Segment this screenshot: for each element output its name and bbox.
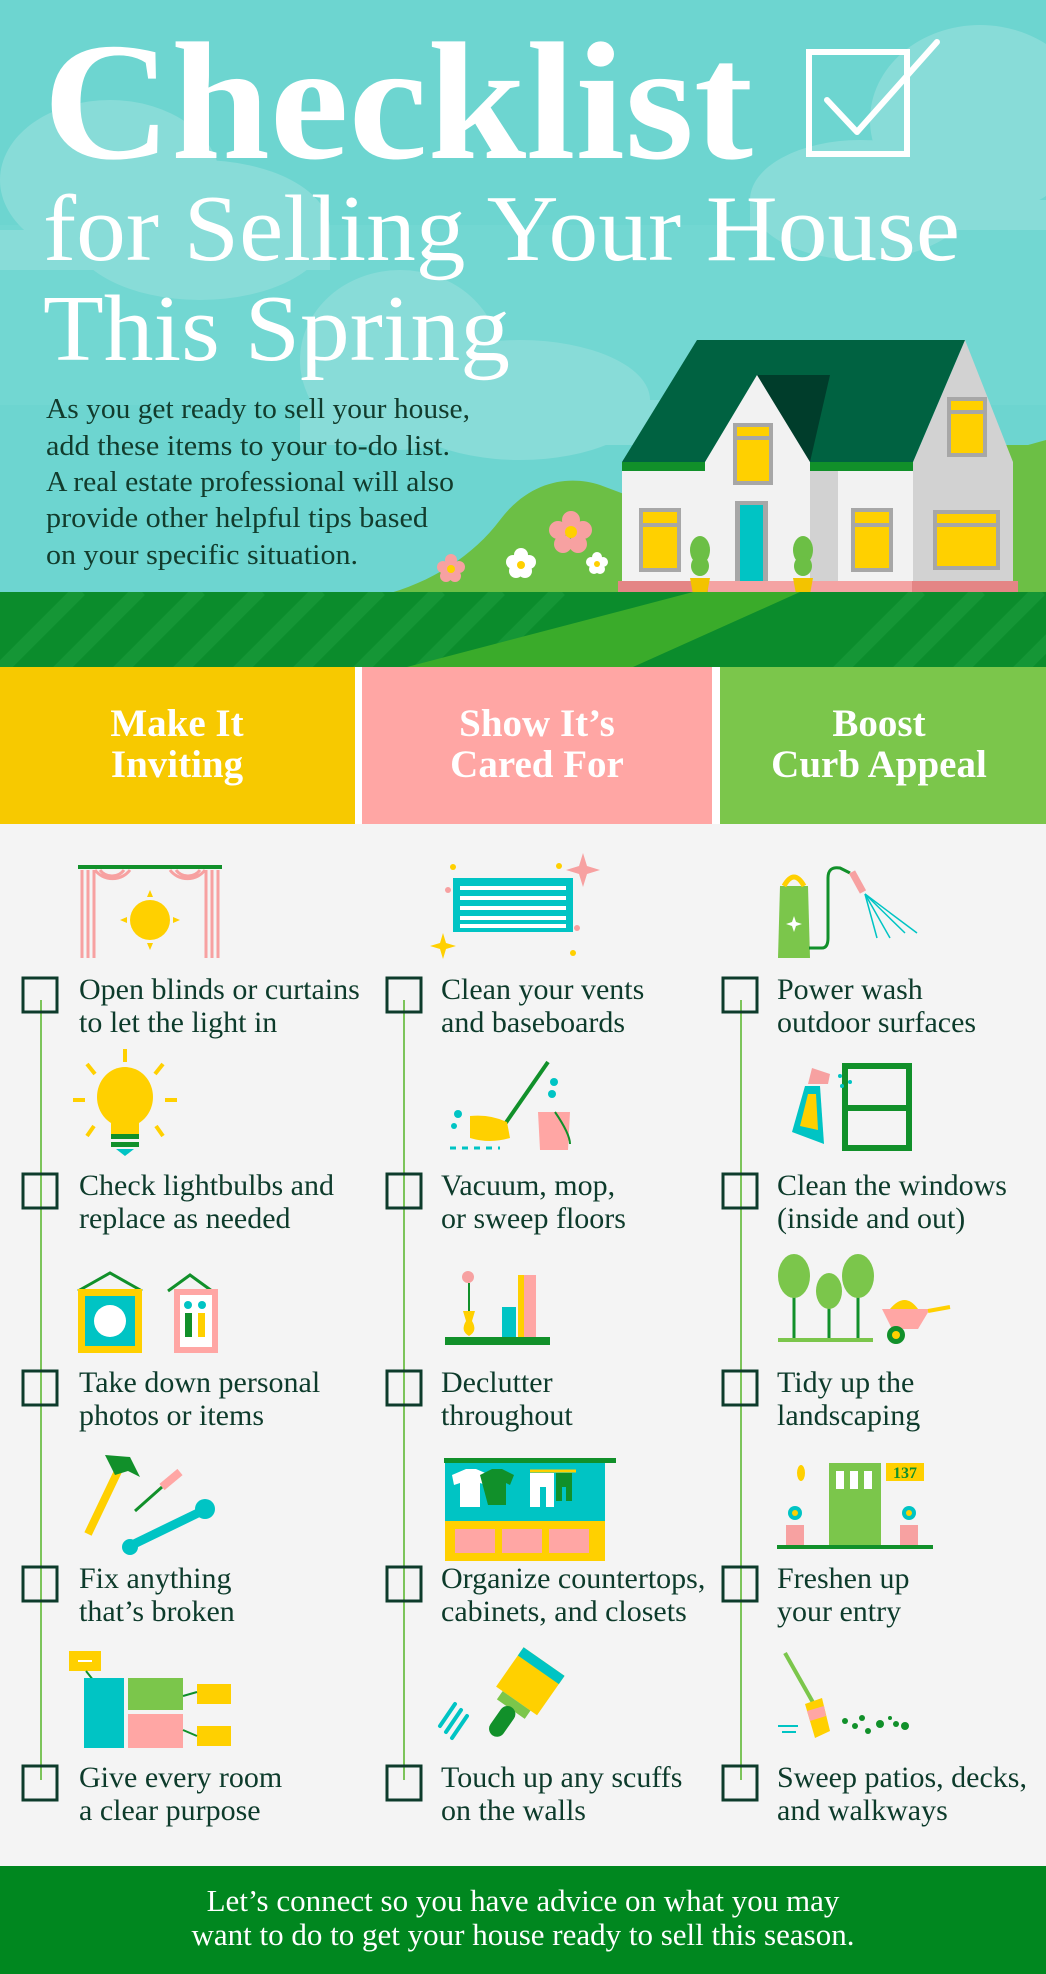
item: landscaping: landscaping <box>777 1399 920 1432</box>
item: touch up scuffs: Touch up any scuffs <box>441 1761 682 1794</box>
column 1: Make It Inviting items <box>23 867 360 1827</box>
item: fix broken: that’s broken <box>79 1595 235 1628</box>
item: power wash <box>723 868 976 1039</box>
subtitle: for Selling Your House <box>43 177 960 281</box>
intro paragraph: on your specific situation. <box>46 540 358 571</box>
body background <box>0 824 1046 1866</box>
item: personal photos: Take down personal <box>79 1366 320 1399</box>
hills and flowers <box>360 440 1046 605</box>
item: room purpose: a clear purpose <box>79 1794 261 1827</box>
item: lightbulbs: replace as needed <box>79 1202 291 1235</box>
header tab: Show It's Cared For: Cared For <box>450 743 624 786</box>
item: vents: Clean your vents <box>441 973 644 1006</box>
item: open blinds: to let the light in <box>79 1006 277 1039</box>
item: open blinds <box>23 867 360 1039</box>
intro paragraph <box>46 394 470 571</box>
header tab: Make It Inviting: Make It <box>110 702 244 745</box>
item: lightbulbs: Check lightbulbs and <box>79 1169 334 1202</box>
intro paragraph: As you get ready to sell your house, <box>46 394 470 425</box>
icon: title checkbox <box>809 42 937 154</box>
timeline lines <box>41 1000 741 1780</box>
item: touch up scuffs: on the walls <box>441 1794 586 1827</box>
header tab: Show It's Cared For <box>362 667 712 824</box>
item: vacuum mop <box>387 1062 626 1235</box>
subtitle: This Spring <box>43 277 510 381</box>
column 2: Show It's Cared For items <box>387 853 705 1827</box>
house <box>618 340 1018 594</box>
item: lightbulbs <box>23 1049 334 1235</box>
item: organize closets: Organize countertops, <box>441 1562 705 1595</box>
item: vacuum mop: or sweep floors <box>441 1202 626 1235</box>
item: freshen entry: Freshen up <box>777 1562 909 1595</box>
item: landscaping <box>723 1254 950 1432</box>
item: sweep patios: Sweep patios, decks, <box>777 1761 1027 1794</box>
item: clean windows: Clean the windows <box>777 1169 1007 1202</box>
footer <box>0 1866 1046 1974</box>
item: declutter <box>387 1271 573 1432</box>
item: open blinds: Open blinds or curtains <box>79 973 360 1006</box>
ground lawn <box>0 592 1046 667</box>
item: freshen entry: 137 <box>893 1465 917 1482</box>
header background <box>0 0 1046 667</box>
item: declutter: throughout <box>441 1399 573 1432</box>
title: Checklist: Checklist <box>43 9 753 195</box>
item: sweep patios: and walkways <box>777 1794 948 1827</box>
item: fix broken <box>23 1455 235 1628</box>
item: personal photos <box>23 1273 320 1432</box>
column 3: Boost Curb Appeal items <box>723 868 1027 1827</box>
item: organize closets <box>387 1458 705 1628</box>
header tab: Boost Curb Appeal: Boost <box>832 702 926 745</box>
item: room purpose <box>23 1651 282 1827</box>
item: landscaping: Tidy up the <box>777 1366 914 1399</box>
intro paragraph: add these items to your to-do list. <box>46 431 450 462</box>
footer: want to do to get your house ready to sell this season. <box>192 1917 854 1952</box>
item: clean windows: (inside and out) <box>777 1202 965 1235</box>
subtitle <box>43 177 960 381</box>
item: vents <box>387 853 644 1039</box>
item: clean windows <box>723 1066 1007 1235</box>
item: personal photos: photos or items <box>79 1399 264 1432</box>
header tab: Boost Curb Appeal <box>720 667 1046 824</box>
item: touch up scuffs <box>387 1647 682 1827</box>
item: power wash: outdoor surfaces <box>777 1006 976 1039</box>
header tab: Make It Inviting: Inviting <box>111 743 244 786</box>
item: freshen entry <box>723 1463 933 1628</box>
item: power wash: Power wash <box>777 973 923 1006</box>
item: declutter: Declutter <box>441 1366 553 1399</box>
item: freshen entry: your entry <box>777 1595 901 1628</box>
footer: Let’s connect so you have advice on what you may <box>207 1883 840 1918</box>
intro paragraph: A real estate professional will also <box>46 467 454 498</box>
header tab background gap <box>0 667 1046 824</box>
item: organize closets: cabinets, and closets <box>441 1595 687 1628</box>
item: vacuum mop: Vacuum, mop, <box>441 1169 615 1202</box>
header tab: Make It Inviting <box>0 667 355 824</box>
intro paragraph: provide other helpful tips based <box>46 503 428 534</box>
item: room purpose: Give every room <box>79 1761 282 1794</box>
item: fix broken: Fix anything <box>79 1562 232 1595</box>
header tab: Show It's Cared For: Show It’s <box>459 702 615 745</box>
item: sweep patios <box>723 1653 1027 1827</box>
header tab: Boost Curb Appeal: Curb Appeal <box>771 743 987 786</box>
item: vents: and baseboards <box>441 1006 625 1039</box>
